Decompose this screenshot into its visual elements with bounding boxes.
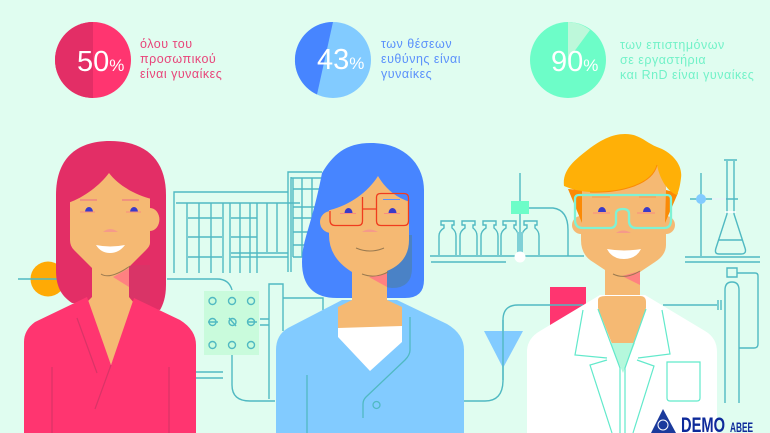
stat: 50 percent — [55, 22, 222, 98]
person 3: scientist in lab coat — [527, 134, 717, 433]
icon: orange circle — [30, 262, 66, 296]
stat: 50 percent: προσωπικού — [140, 52, 216, 66]
stat: 43 percent: ευθύνης είναι — [381, 52, 461, 66]
logo — [651, 409, 753, 433]
flask stand — [690, 160, 746, 256]
face details — [340, 200, 400, 251]
stat: 90 percent: και RnD είναι γυναίκες — [620, 68, 754, 82]
gas cylinder — [718, 268, 758, 403]
neck and face — [329, 172, 409, 320]
hair — [302, 143, 424, 298]
fringe — [68, 165, 152, 203]
stat: 50 percent: όλου του — [140, 37, 193, 51]
orange sideburns — [568, 189, 678, 223]
stat: 90 percent: των επιστημόνων — [620, 38, 725, 52]
funnel pipe — [502, 320, 504, 380]
stat: 43 percent: γυναίκες — [381, 67, 432, 81]
face details — [592, 197, 656, 259]
stat: 90 percent: σε εργαστήρια — [620, 53, 706, 67]
neck and face — [581, 160, 666, 300]
lab line drawings — [18, 160, 760, 403]
chip: green panel with valves — [204, 291, 259, 355]
eyes — [80, 200, 141, 253]
fringe — [315, 168, 410, 212]
ears — [572, 216, 590, 234]
ear — [320, 211, 342, 233]
stat: 50 percent: είναι γυναίκες — [140, 67, 222, 81]
stat: 43 percent: 43% — [317, 44, 364, 76]
pink top — [24, 297, 196, 433]
hairline — [590, 165, 657, 192]
hair — [564, 134, 681, 195]
stat: 90 percent: 90% — [551, 46, 598, 78]
person 2: manager in blue — [276, 143, 464, 433]
funnel — [484, 331, 523, 368]
stat: 43 percent — [295, 22, 461, 98]
white coat — [527, 295, 717, 433]
pink square — [550, 287, 586, 327]
blue jacket — [276, 300, 464, 433]
hair — [56, 141, 166, 310]
stat: 50 percent: 50% — [77, 46, 124, 78]
person 1: scientist in pink — [24, 141, 196, 433]
stat: 90 percent — [530, 22, 754, 98]
glasses — [330, 194, 408, 226]
pipes — [18, 279, 717, 401]
stat: 43 percent: των θέσεων — [381, 37, 452, 51]
building — [174, 192, 300, 273]
neck and face — [70, 170, 150, 365]
clamp and joints — [511, 194, 736, 262]
goggles — [575, 195, 671, 228]
vials — [439, 221, 539, 255]
